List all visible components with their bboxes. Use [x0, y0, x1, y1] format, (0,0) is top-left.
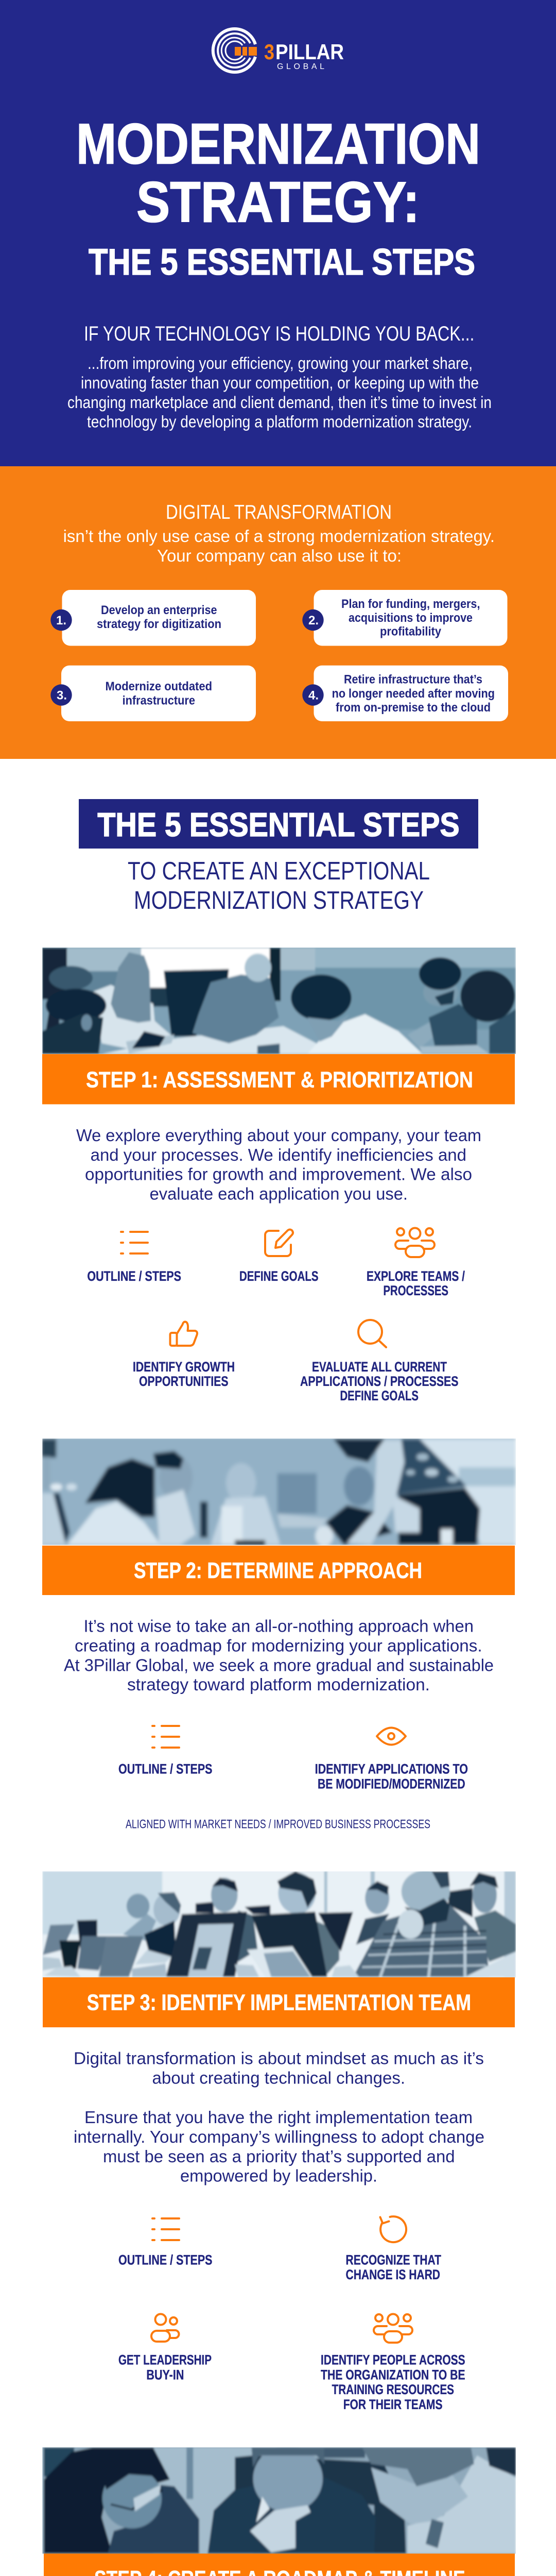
step 1 body text: We explore everything about your company, your team — [76, 1126, 481, 1145]
label: explore teams: EXPLORE TEAMS / — [367, 1268, 465, 1284]
label: recognize change: RECOGNIZE THAT — [346, 2252, 441, 2267]
photo: step 4 three colleagues — [41, 2445, 516, 2556]
icon: eye — [377, 1728, 406, 1744]
step 1 body text: opportunities for growth and improvement. We also — [85, 1165, 472, 1184]
subheading: IF YOUR TECHNOLOGY IS HOLDING YOU BACK... — [84, 323, 475, 345]
icon: team — [374, 2314, 412, 2343]
panel: digital transformation use cases — [0, 466, 556, 759]
label: identify people: FOR THEIR TEAMS — [343, 2397, 443, 2412]
step 4 header bar — [44, 2553, 515, 2576]
card 4 — [302, 666, 508, 721]
icon: outline list — [152, 2218, 179, 2240]
label: evaluate applications — [300, 1359, 458, 1403]
card 3: 3. — [57, 688, 67, 703]
card 4: Retire infrastructure that’s — [344, 673, 482, 687]
panel heading: Your company can also use it to: — [157, 546, 402, 565]
logo: 3Pillar Global: PILLAR — [275, 40, 344, 64]
label: leadership buy-in: BUY-IN — [146, 2367, 184, 2382]
label: recognize change — [346, 2252, 441, 2282]
label: identify people: IDENTIFY PEOPLE ACROSS — [321, 2352, 465, 2368]
title — [76, 112, 480, 283]
card 3: infrastructure — [123, 693, 195, 708]
label: outline / steps: OUTLINE / STEPS — [87, 1268, 181, 1284]
label: recognize change: CHANGE IS HARD — [346, 2267, 440, 2282]
icon: outline list — [121, 1232, 148, 1253]
step 1 body text: and your processes. We identify inefficiencies and — [91, 1145, 466, 1164]
step 2 header bar — [42, 1546, 515, 1595]
photo: step 1 team at table — [41, 945, 516, 1056]
step 3 body text: must be seen as a priority that’s supported and — [103, 2147, 455, 2166]
logo: 3Pillar Global — [213, 29, 344, 72]
label: identify growth: IDENTIFY GROWTH — [133, 1359, 235, 1375]
card 2: acquisitions to improve — [349, 611, 473, 625]
panel heading: isn’t the only use case of a strong modernization strategy. — [63, 527, 495, 546]
intro paragraph: changing marketplace and client demand, then it’s time to invest in — [67, 393, 492, 412]
step 3 header bar: STEP 3: IDENTIFY IMPLEMENTATION TEAM — [87, 1990, 471, 2015]
card 1 — [50, 590, 256, 646]
card 1: strategy for digitization — [97, 617, 221, 631]
step 3 body text: Ensure that you have the right implementation team — [84, 2108, 473, 2127]
step 3 body text: about creating technical changes. — [152, 2068, 405, 2088]
label: evaluate applications: APPLICATIONS / PROCESSES — [300, 1374, 458, 1389]
step 3 body text — [74, 2049, 484, 2185]
card 3 — [50, 666, 256, 721]
icon: team — [395, 1228, 435, 1257]
card 4: from on-premise to the cloud — [336, 701, 491, 715]
title: MODERNIZATION — [76, 112, 480, 176]
card 2 — [302, 590, 508, 646]
label: identify applications: BE MODIFIED/MODERNIZED — [318, 1776, 465, 1791]
card 4: 4. — [308, 688, 319, 703]
section banner: the 5 essential steps: THE 5 ESSENTIAL STEPS — [97, 806, 460, 843]
label: identify applications — [315, 1761, 468, 1791]
header panel — [0, 0, 556, 467]
panel heading: DIGITAL TRANSFORMATION — [166, 501, 392, 523]
card 4: no longer needed after moving — [332, 687, 495, 701]
step 3 body text: internally. Your company’s willingness to adopt change — [74, 2127, 484, 2146]
label: outline / steps: OUTLINE / STEPS — [118, 2252, 212, 2267]
card 1: 1. — [56, 614, 66, 628]
label: identify people — [321, 2352, 465, 2412]
section banner: the 5 essential steps — [79, 799, 478, 849]
label: define goals: DEFINE GOALS — [239, 1268, 318, 1284]
step 3 body text: Digital transformation is about mindset as much as it’s — [74, 2049, 484, 2068]
card 2: profitability — [380, 624, 441, 639]
icon: pen — [265, 1229, 293, 1256]
label: identify growth: OPPORTUNITIES — [139, 1374, 229, 1389]
intro paragraph: ...from improving your efficiency, growing your market share, — [88, 354, 473, 372]
step 1 header bar: STEP 1: ASSESSMENT & PRIORITIZATION — [86, 1067, 473, 1092]
label: leadership buy-in — [118, 2352, 212, 2382]
panel heading — [63, 501, 495, 565]
card 2: Plan for funding, mergers, — [341, 597, 480, 611]
label: identify growth — [133, 1359, 235, 1389]
step 1 body text — [76, 1126, 481, 1204]
section subheading: MODERNIZATION STRATEGY — [134, 887, 424, 914]
step 2 body text — [64, 1617, 494, 1694]
title: THE 5 ESSENTIAL STEPS — [89, 242, 475, 283]
label: explore teams — [367, 1268, 465, 1298]
step 1 body text: evaluate each application you use. — [150, 1184, 408, 1204]
label: outline / steps: OUTLINE / STEPS — [118, 1761, 212, 1777]
label: identify applications: IDENTIFY APPLICATIONS TO — [315, 1761, 468, 1777]
card 3: Modernize outdated — [105, 680, 212, 693]
title: STRATEGY: — [136, 170, 420, 234]
logo: 3Pillar Global: GLOBAL — [277, 62, 324, 71]
label: leadership buy-in: GET LEADERSHIP — [118, 2352, 212, 2368]
label: evaluate applications: DEFINE GOALS — [340, 1388, 419, 1403]
step 2 body text: creating a roadmap for modernizing your applications. — [75, 1636, 482, 1655]
section subheading — [128, 857, 430, 914]
logo: 3Pillar Global: 3 — [264, 40, 274, 64]
label: evaluate applications: EVALUATE ALL CURRENT — [312, 1359, 447, 1375]
icon: rotate arrow — [380, 2216, 406, 2242]
section subheading: TO CREATE AN EXCEPTIONAL — [128, 857, 430, 885]
card 1: Develop an enterprise — [101, 603, 217, 617]
note: market needs: ALIGNED WITH MARKET NEEDS / IMPROVED BUSINESS PROCESSES — [126, 1818, 430, 1832]
step 2 body text: At 3Pillar Global, we seek a more gradual and sustainable — [64, 1655, 494, 1674]
icon: two people — [151, 2314, 179, 2342]
icon: thumbs up — [170, 1322, 197, 1346]
label: identify people: TRAINING RESOURCES — [332, 2382, 454, 2397]
step 2 body text: strategy toward platform modernization. — [127, 1675, 430, 1694]
photo: step 2 meeting — [41, 1436, 516, 1547]
label: identify people: THE ORGANIZATION TO BE — [321, 2367, 465, 2382]
card 2: 2. — [308, 614, 319, 628]
icon: magnifier — [358, 1320, 386, 1347]
step 3 header bar — [43, 1977, 515, 2027]
step 3 body text: empowered by leadership. — [180, 2166, 377, 2185]
intro paragraph — [67, 354, 492, 431]
intro paragraph: technology by developing a platform modernization strategy. — [87, 412, 472, 431]
label: explore teams: PROCESSES — [383, 1283, 448, 1298]
step 1 header bar — [42, 1054, 515, 1104]
step 2 header bar: STEP 2: DETERMINE APPROACH — [134, 1558, 422, 1583]
step 2 body text: It’s not wise to take an all-or-nothing approach when — [83, 1617, 474, 1636]
icon: outline list — [152, 1726, 179, 1748]
photo: step 3 team with laptops — [41, 1869, 516, 1980]
intro paragraph: innovating faster than your competition, or keeping up with the — [81, 374, 479, 392]
